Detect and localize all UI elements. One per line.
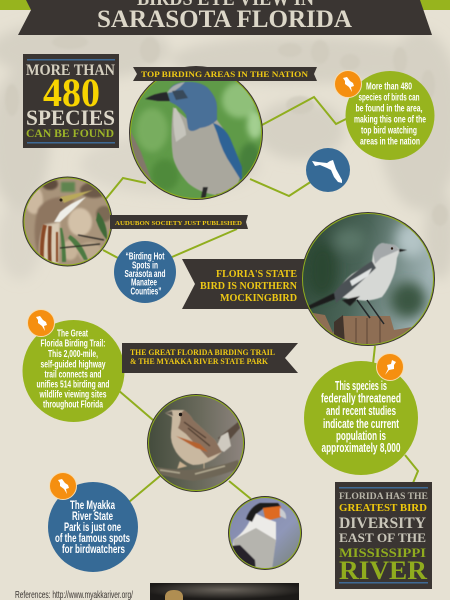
stat box: more than 480 species: SPECIES [26,105,115,130]
background leaf texture [0,20,450,280]
icon: pin 3 [376,354,404,380]
callout: Myakka River State Park: of the famous spots [55,533,130,545]
photo: scrub jay [129,66,263,200]
callout: Myakka River State Park: for birdwatchers [62,544,125,556]
photo: mockingbird [300,212,436,350]
stat box: greatest bird diversity: FLORIDA HAS THE [339,492,428,502]
ribbon: top birding areas: TOP BIRDING AREAS IN THE NATION [141,70,308,79]
ribbon: birding trail and Myakka [122,343,298,373]
stat box: greatest bird diversity: RIVER [339,556,427,585]
callout: birding hot spots: Manatee [131,278,157,288]
callout: federally threatened: This species is [335,379,387,393]
callout: birding hot spots: Sarasota and [124,269,166,280]
callout: Florida birding trail: Florida Birding Trail: [40,338,106,350]
stat box: more than 480 species: MORE THAN [26,62,115,79]
stat box: greatest bird diversity: GREATEST BIRD [339,503,427,514]
callout: Florida birding trail: unifies 514 birding and [36,378,110,390]
ribbon: state bird: BIRD IS NORTHERN [200,281,297,292]
ribbon: state bird: MOCKINGBIRD [220,293,297,304]
ribbon: birding trail and Myakka: & THE MYAKKA RIVER STATE PARK [130,357,269,366]
icon: pin 4 [50,472,76,500]
title line 2: SARASOTA FLORIDA [97,6,352,33]
callout: birding hot spots [114,241,176,303]
connector lines [103,97,418,502]
ribbon: top birding areas [133,67,317,81]
stat box: greatest bird diversity: MISSISSIPPI [339,545,426,560]
callout: Myakka River State Park [48,482,138,572]
photo: sparrow [147,394,245,492]
footer logo panel [150,583,299,600]
callout: birding hot spots: Spots in [132,260,158,272]
stat box: greatest bird diversity: EAST OF THE [339,530,426,545]
callout: Myakka River State Park: Park is just one [64,522,121,534]
stat box: greatest bird diversity [335,482,432,589]
callout: federally threatened: federally threatened [321,392,401,406]
callout: more than 480 species: top bird watching [361,124,417,136]
ribbon: birding trail and Myakka: THE GREAT FLORIDA BIRDING TRAIL [130,348,275,357]
icon: pin 2 [28,310,54,336]
ribbon: state bird: FLORIA'S STATE [216,269,297,280]
callout: federally threatened [304,361,418,475]
callout: Florida birding trail: The Great [57,328,88,340]
stat box: greatest bird diversity: DIVERSITY [339,515,426,532]
callout: federally threatened: approximately 8,000 [322,441,401,455]
callout: Florida birding trail: throughout Florida [43,398,103,410]
title banner [0,0,450,35]
photo: bittern [22,176,112,266]
callout: more than 480 species: More than 480 [366,80,412,92]
callout: Florida birding trail [22,320,124,422]
icon: pin 1 [334,70,362,98]
photo: caracara [228,496,302,572]
ribbon: Audubon [110,215,248,229]
callout: more than 480 species: areas in the nation [360,136,420,148]
callout: Florida birding trail: This 2,000-mile, [48,348,98,360]
icon: Florida map [306,148,350,192]
callout: Myakka River State Park: River State [72,511,113,523]
callout: Myakka River State Park: The Myakka [70,500,115,512]
stat box: more than 480 species: CAN BE FOUND [26,126,114,140]
callout: more than 480 species [346,71,434,160]
ribbon: Audubon: AUDUBON SOCIETY JUST PUBLISHED [115,220,242,227]
stat box: more than 480 species: 480 [43,70,100,115]
stat box: more than 480 species [23,54,119,148]
callout: Florida birding trail: wildlife viewing sites [39,388,107,400]
callout: federally threatened: indicate the current [323,417,400,431]
ribbon: state bird [182,259,310,309]
callout: birding hot spots: Counties” [130,286,162,298]
callout: federally threatened: population is [336,429,386,443]
callout: Florida birding trail: trail connects and [44,368,102,380]
callout: Florida birding trail: self-guided highway [40,358,106,370]
callout: federally threatened: and recent studies [326,404,396,418]
callout: birding hot spots: “Birding Hot [126,252,165,262]
